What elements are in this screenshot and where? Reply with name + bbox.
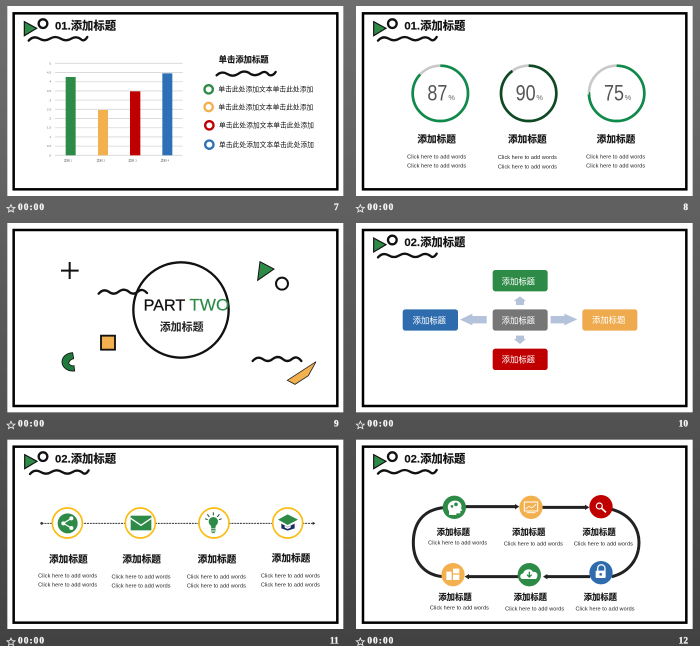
bar chart: 类别 2 bbox=[97, 158, 105, 163]
icon: monitor chart bbox=[519, 496, 543, 519]
bar chart: 类别 3 bbox=[128, 158, 137, 163]
ring 75%: 75 bbox=[604, 81, 624, 106]
legend list: 单击此处添加文本单击此处添加 bbox=[219, 121, 314, 130]
ring captions: Click here to add words bbox=[407, 163, 466, 169]
section title circle: TWO bbox=[189, 295, 229, 314]
slide 11 footer bbox=[7, 636, 339, 646]
slide 10 heading: 02.添加标题 bbox=[404, 235, 466, 249]
ring captions: Click here to add words bbox=[498, 164, 557, 170]
slide 10: cross diagram bbox=[356, 223, 693, 430]
legend list: 单击此处添加文本单击此处添加 bbox=[218, 102, 313, 111]
icon: share bbox=[52, 508, 82, 538]
process captions bbox=[428, 527, 635, 612]
process captions: 添加标题 bbox=[437, 527, 471, 537]
slide 7 footer bbox=[7, 203, 339, 213]
section title circle: PART bbox=[144, 298, 186, 315]
box: centre: 添加标题 bbox=[502, 316, 536, 326]
legend heading: 单击添加标题 bbox=[219, 55, 269, 65]
slide 10 heading bbox=[374, 235, 466, 257]
bar chart: 4.5 bbox=[47, 71, 51, 75]
ring 90% bbox=[501, 66, 556, 121]
timeline captions: Click here to add words bbox=[111, 574, 171, 580]
bar chart: 1 bbox=[49, 135, 51, 139]
icon: graduation cap bbox=[273, 508, 303, 538]
process captions: 添加标题 bbox=[582, 527, 616, 537]
ring captions: Click here to add words bbox=[407, 154, 466, 160]
slide 12 heading: 02.添加标题 bbox=[404, 452, 466, 466]
box: bottom bbox=[493, 349, 548, 370]
timeline captions: 添加标题 bbox=[122, 553, 161, 565]
process captions: Click here to add words bbox=[428, 541, 487, 547]
slide 9 footer: 00:00 bbox=[18, 420, 44, 430]
ring 90%: % bbox=[536, 93, 543, 102]
slide 7 footer: 00:00 bbox=[18, 203, 44, 213]
icon: cloud download bbox=[518, 563, 541, 586]
slide 7 footer: 7 bbox=[334, 203, 339, 213]
box: left bbox=[403, 309, 458, 331]
bar chart: 0 bbox=[49, 153, 51, 157]
icon: magnifier bbox=[589, 495, 613, 518]
box: centre bbox=[493, 309, 548, 331]
slide 9 footer: 9 bbox=[334, 420, 339, 430]
process captions: Click here to add words bbox=[430, 605, 489, 611]
bar chart: 3 bbox=[49, 98, 51, 102]
slide 12 footer bbox=[356, 636, 688, 646]
ring 87% bbox=[413, 66, 468, 121]
ring captions: Click here to add words bbox=[586, 154, 645, 160]
slide 8 footer: 00:00 bbox=[367, 203, 394, 213]
slide 8 footer bbox=[356, 203, 688, 213]
bar chart: 类别 4 bbox=[161, 158, 169, 163]
dashed timeline bbox=[40, 522, 315, 525]
slide 7 heading: 01.添加标题 bbox=[55, 18, 117, 32]
timeline captions: Click here to add words bbox=[187, 583, 246, 589]
slide 8: progress rings bbox=[356, 6, 693, 213]
ring 75%: % bbox=[625, 93, 632, 102]
icon: light bulb bbox=[199, 508, 229, 538]
slide 10 footer: 10 bbox=[679, 420, 688, 430]
legend list bbox=[204, 85, 314, 149]
process captions: Click here to add words bbox=[575, 606, 635, 612]
section title circle: 添加标题 bbox=[160, 319, 204, 333]
ring captions: 添加标题 bbox=[597, 134, 636, 146]
flow arrows bbox=[460, 296, 577, 344]
box: right: 添加标题 bbox=[592, 315, 626, 325]
slide 9: section divider bbox=[7, 223, 343, 430]
slide 8 footer: 8 bbox=[683, 203, 688, 213]
icon: lock bbox=[589, 561, 613, 584]
slide 8 heading: 01.添加标题 bbox=[404, 18, 466, 32]
slide 10 footer: 00:00 bbox=[367, 420, 394, 430]
ring 87%: % bbox=[448, 93, 455, 102]
timeline captions: Click here to add words bbox=[261, 574, 320, 580]
bar chart: 5 bbox=[49, 61, 51, 65]
timeline captions: 添加标题 bbox=[272, 553, 311, 565]
process captions: 添加标题 bbox=[438, 592, 472, 602]
bar chart bbox=[47, 61, 183, 163]
box: right bbox=[582, 309, 637, 331]
box: left: 添加标题 bbox=[413, 316, 447, 326]
process captions: 添加标题 bbox=[584, 592, 618, 602]
process captions: 添加标题 bbox=[512, 527, 546, 537]
slide 11 heading bbox=[25, 452, 117, 474]
bar chart: 1.5 bbox=[47, 126, 51, 130]
slide 7: bar chart bbox=[7, 6, 343, 213]
slide 12 heading bbox=[374, 452, 466, 474]
slide 10 footer bbox=[356, 420, 688, 430]
timeline captions: Click here to add words bbox=[38, 574, 97, 580]
ring captions: Click here to add words bbox=[586, 163, 645, 169]
process captions: 添加标题 bbox=[514, 592, 548, 602]
ring captions: 添加标题 bbox=[417, 134, 456, 146]
slide 8 heading bbox=[374, 18, 466, 41]
icon: documents bbox=[441, 563, 465, 586]
bar chart: 类别 1 bbox=[64, 158, 73, 163]
legend heading bbox=[217, 55, 276, 76]
legend list: 单击此处添加文本单击此处添加 bbox=[218, 85, 313, 94]
process captions: Click here to add words bbox=[574, 541, 633, 547]
timeline captions bbox=[38, 553, 320, 589]
ring 87%: 87 bbox=[427, 81, 447, 106]
box: top bbox=[493, 270, 548, 291]
box: top: 添加标题 bbox=[502, 276, 536, 286]
loop connectors bbox=[413, 507, 639, 577]
bar chart: 0.5 bbox=[47, 144, 51, 148]
bar chart: 2 bbox=[49, 117, 51, 121]
legend list: 单击此处添加文本单击此处添加 bbox=[219, 140, 314, 149]
slide 11 heading: 02.添加标题 bbox=[55, 452, 117, 466]
slide 12: process loop bbox=[356, 440, 693, 646]
ring captions: 添加标题 bbox=[508, 134, 547, 146]
timeline captions: 添加标题 bbox=[49, 553, 88, 565]
bar chart: 4 bbox=[49, 80, 51, 84]
decorative shapes bbox=[61, 262, 316, 384]
timeline captions: Click here to add words bbox=[261, 583, 320, 589]
icon: envelope bbox=[125, 508, 155, 538]
timeline captions: Click here to add words bbox=[187, 574, 246, 580]
ring 75% bbox=[589, 66, 644, 121]
timeline captions: Click here to add words bbox=[38, 583, 97, 589]
slide 11: timeline bbox=[7, 440, 343, 646]
bar chart: 2.5 bbox=[47, 107, 51, 111]
slide 7 heading bbox=[24, 18, 117, 41]
bar chart: 3.5 bbox=[47, 89, 51, 93]
process captions: Click here to add words bbox=[505, 606, 564, 612]
section title circle bbox=[133, 262, 229, 358]
ring captions: Click here to add words bbox=[498, 155, 557, 161]
icon: head bbox=[443, 496, 466, 519]
process captions: Click here to add words bbox=[504, 541, 563, 547]
ring 90%: 90 bbox=[516, 81, 536, 106]
timeline captions: 添加标题 bbox=[198, 553, 237, 565]
timeline captions: Click here to add words bbox=[111, 583, 171, 589]
box: bottom: 添加标题 bbox=[502, 354, 536, 364]
ring captions bbox=[407, 134, 645, 170]
arrowheads bbox=[465, 504, 589, 579]
slide 9 footer bbox=[7, 420, 339, 430]
